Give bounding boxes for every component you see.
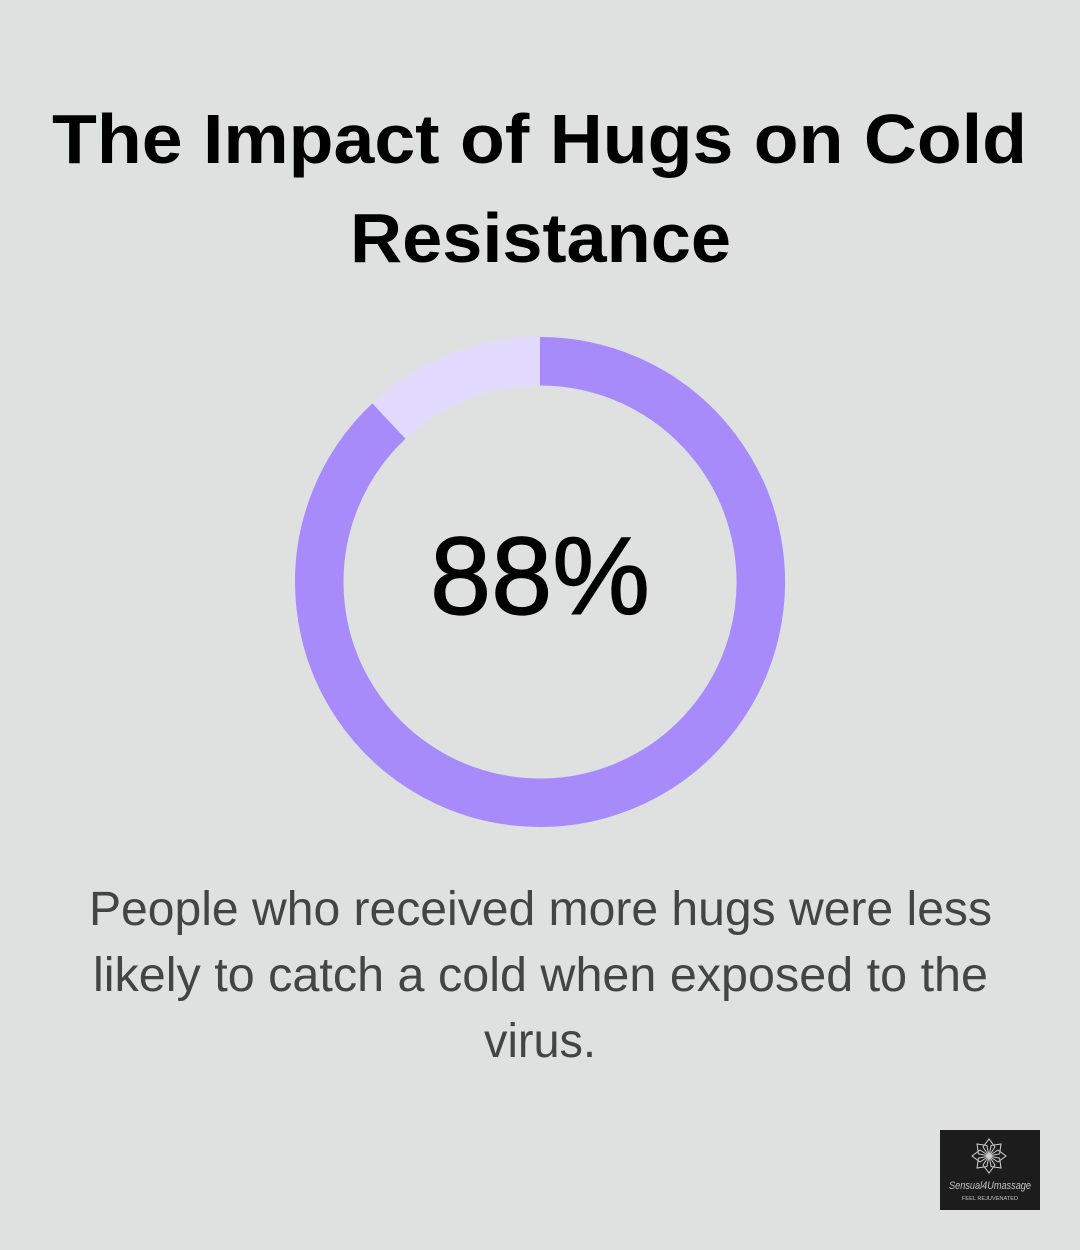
description text: People who received more hugs were less (89, 883, 992, 936)
logo tagline: FEEL REJUVENATED (962, 1196, 1018, 1202)
logo badge (940, 1130, 1040, 1210)
center value: 88% (430, 515, 650, 638)
title: The Impact of Hugs on Cold (52, 100, 1027, 178)
donut chart: 88% (319, 361, 761, 803)
icon: flower logo (972, 1139, 1006, 1173)
description text: likely to catch a cold when exposed to the (93, 949, 988, 1002)
logo script name: Sensual4Umassage (949, 1180, 1031, 1192)
description text (89, 883, 992, 1068)
description text: virus. (484, 1015, 596, 1068)
title (52, 100, 1027, 277)
title: Resistance (350, 199, 731, 277)
ring track: remaining 12% (319, 361, 761, 803)
ring value: 88% (319, 361, 761, 803)
